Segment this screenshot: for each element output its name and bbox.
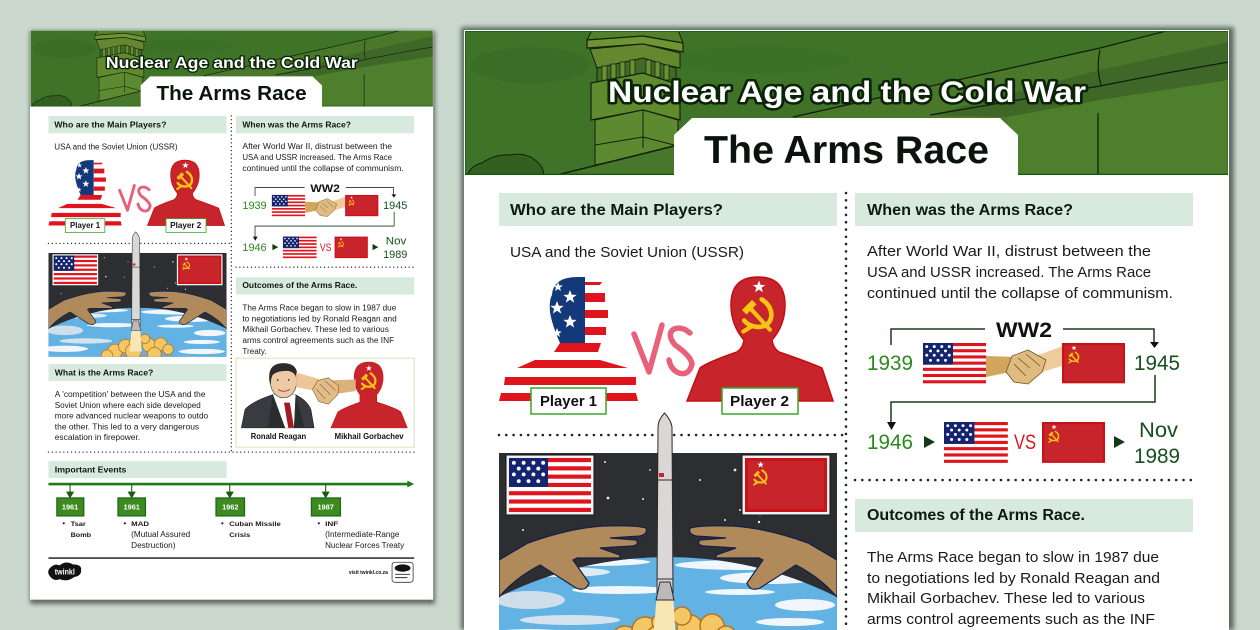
timeline: important events: Nuclear Forces Treaty — [325, 541, 404, 550]
text: outcomes: to negotiations led by Ronald Reagan and — [867, 570, 1160, 587]
shadow: large page — [461, 27, 1234, 630]
chart: WW2 timeline: WW2 — [310, 183, 340, 195]
chart: WW2 timeline: 1946 — [867, 431, 913, 454]
text: outcomes: arms control agreements such as the INF — [867, 611, 1155, 628]
chart: WW2 timeline: 1946 — [242, 242, 267, 254]
chart: WW2 timeline: VS — [320, 242, 331, 254]
chart: WW2 timeline: 1989 — [383, 249, 407, 261]
timeline: important events — [48, 481, 414, 550]
text: when — [867, 243, 1173, 302]
chart: WW2 timeline: 1939 — [242, 200, 267, 212]
chart: WW2 timeline: 1945 — [383, 200, 407, 212]
text: when: After World War II, distrust between the — [867, 243, 1151, 260]
chart: WW2 timeline: Nov — [386, 235, 407, 247]
heading: The Arms Race: The Arms Race — [156, 82, 307, 105]
section headings: Who are the Main Players? — [54, 119, 166, 129]
text: what is: the other. This led to a very dangerous — [55, 422, 199, 431]
text: when: USA and USSR increased. The Arms Race — [867, 264, 1151, 281]
text: when: After World War II, distrust between the — [242, 142, 393, 151]
timeline: important events: Cuban Missile — [229, 521, 281, 528]
text: outcomes: to negotiations led by Ronald Reagan and — [242, 314, 397, 323]
vs — [634, 325, 692, 374]
timeline: important events: 1987 — [317, 503, 334, 512]
timeline: important events: MAD — [131, 521, 149, 528]
panel: leaders: Ronald Reagan — [251, 432, 306, 441]
timeline: important events: (Intermediate-Range — [325, 530, 400, 539]
section headings: Important Events — [55, 465, 127, 475]
text: outcomes: The Arms Race began to slow in 1987 due — [867, 549, 1159, 566]
chart: WW2 timeline: WW2 — [996, 319, 1052, 342]
section headings: When was the Arms Race? — [867, 202, 1073, 219]
timeline: important events: (Mutual Assured — [131, 530, 190, 539]
rocket — [131, 232, 141, 330]
timeline: important events: Bomb — [71, 532, 91, 539]
chart: WW2 timeline: 1945 — [1134, 352, 1180, 375]
footer logo — [48, 563, 81, 580]
chart: WW2 timeline — [867, 319, 1180, 468]
header banner — [30, 30, 434, 107]
timeline: important events: Crisis — [229, 532, 250, 539]
section bars — [48, 116, 414, 478]
panel: leaders — [236, 358, 414, 447]
panel: leaders: Mikhail Gorbachev — [335, 432, 404, 441]
header tab — [674, 118, 1018, 176]
heading: The Arms Race: The Arms Race — [704, 129, 989, 172]
player 2 — [687, 277, 833, 414]
title: Nuclear Age: Nuclear Age and the Cold War — [608, 76, 1086, 109]
player 1 — [48, 160, 122, 232]
text: players: USA and the Soviet Union (USSR) — [54, 143, 178, 152]
timeline: important events: 1961 — [124, 503, 140, 512]
section headings — [54, 119, 357, 475]
timeline: important events: 1961 — [62, 503, 78, 512]
timeline: important events: Tsar — [71, 521, 86, 528]
header banner — [464, 30, 1230, 176]
player 1 — [499, 277, 638, 414]
title: Nuclear Age: Nuclear Age and the Cold War — [106, 55, 358, 72]
vs — [120, 185, 150, 211]
section headings — [510, 202, 1085, 524]
footer logo: twinkl — [55, 567, 75, 576]
text: players: USA and the Soviet Union (USSR) — [510, 244, 744, 261]
text: outcomes: Treaty. — [242, 347, 267, 356]
space race scene — [499, 453, 837, 630]
player 1: Player 1 — [540, 393, 597, 410]
text: outcomes — [867, 549, 1160, 628]
panel: large worksheet page — [291, 30, 1230, 630]
header tab — [141, 76, 322, 107]
text: outcomes — [242, 303, 397, 356]
text: when — [242, 142, 404, 173]
section headings: Outcomes of the Arms Race. — [867, 507, 1085, 524]
timeline: important events: 1962 — [222, 503, 238, 512]
footer url: visit twinkl.co.za — [349, 570, 388, 576]
text: what is: escalation in firepower. — [55, 433, 140, 442]
text: outcomes: arms control agreements such as the INF — [242, 336, 394, 345]
text: outcomes: Mikhail Gorbachev. These led to various — [867, 590, 1145, 607]
section headings: What is the Arms Race? — [55, 368, 153, 378]
rocket — [656, 413, 674, 600]
footer badge — [392, 562, 413, 582]
chart: WW2 timeline: 1989 — [1134, 445, 1180, 468]
shadow: small page — [30, 31, 435, 604]
chart: WW2 timeline — [242, 183, 407, 261]
chart: WW2 timeline: 1939 — [867, 352, 913, 375]
section headings: When was the Arms Race? — [242, 119, 351, 129]
player 2 — [148, 160, 224, 232]
text: when: continued until the collapse of communism. — [867, 285, 1173, 302]
text: when: USA and USSR increased. The Arms Race — [242, 153, 393, 162]
text: what is: more advanced nuclear weapons to outdo — [55, 411, 209, 420]
chart: WW2 timeline: VS — [1014, 431, 1036, 454]
text: outcomes: Mikhail Gorbachev. These led to various — [242, 325, 389, 334]
player 2: Player 2 — [730, 393, 789, 410]
text: outcomes: The Arms Race began to slow in 1987 due — [242, 303, 397, 312]
text: when: continued until the collapse of communism. — [242, 164, 404, 173]
text: what is: Soviet Union where each side developed — [55, 401, 201, 410]
section headings: Who are the Main Players? — [510, 202, 723, 219]
space race scene — [0, 253, 336, 630]
player 2: Player 2 — [170, 221, 202, 230]
text: what is: A 'competition' between the USA and the — [55, 390, 206, 399]
text: what is — [55, 390, 209, 442]
section headings: Outcomes of the Arms Race. — [242, 280, 357, 290]
chart: WW2 timeline: Nov — [1139, 419, 1179, 442]
timeline: important events: Destruction) — [131, 541, 176, 550]
timeline: important events: INF — [325, 521, 338, 528]
panel: small worksheet page — [0, 30, 434, 630]
section bars — [499, 193, 1193, 532]
player 1: Player 1 — [70, 221, 101, 230]
